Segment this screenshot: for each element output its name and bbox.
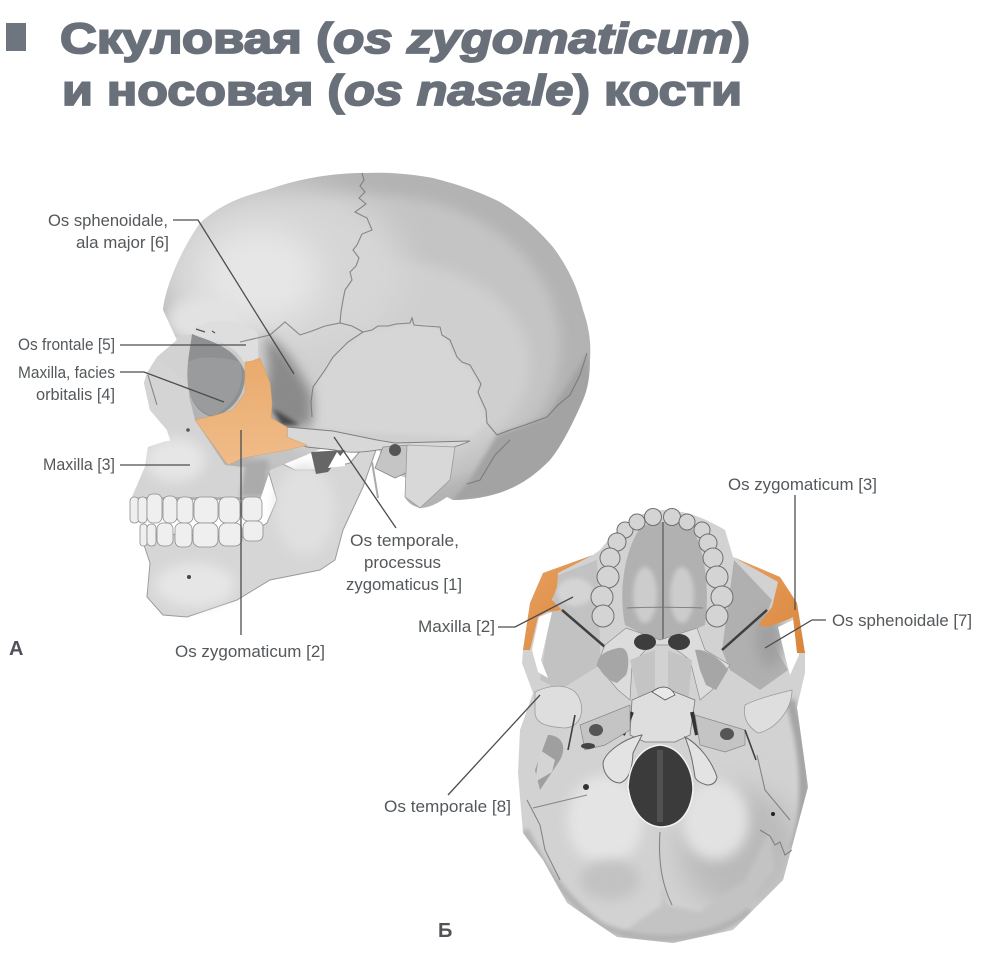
os zygomaticum highlight (orange) [195, 358, 307, 465]
label: Os zygomaticum [3]: Os zygomaticum [3] [728, 475, 877, 494]
label: Os temporale [8] [384, 695, 540, 816]
orbit [187, 321, 258, 417]
label: Os sphenoidale, ala major [6] [48, 211, 294, 374]
occipital condyles [603, 735, 717, 785]
zygomatic arch [287, 427, 470, 452]
upper teeth [591, 508, 733, 627]
pterygoid dark clefts [562, 610, 767, 650]
hard palate [622, 522, 707, 640]
nasal and brow area [144, 334, 194, 396]
label: Maxilla [3]: Maxilla [3] [43, 455, 115, 474]
choanae and pterygoid structures [597, 628, 730, 705]
white gap beside right arch [778, 620, 799, 675]
zygomatic bones right (orange) [733, 557, 805, 653]
title line 2: и носовая ( os nasale ) кости [62, 67, 742, 115]
label: Os sphenoidale [7]: Os sphenoidale [7] [832, 611, 972, 630]
illustration B: skull from below [518, 508, 808, 943]
title [6, 15, 750, 115]
panel letter B: Б [438, 920, 452, 942]
label: Os temporale, processus zygomaticus [1]: zygomaticus [1] [346, 575, 462, 594]
foramen inner shading [657, 750, 663, 822]
title bullet square [6, 23, 26, 51]
sutures [240, 173, 587, 484]
temporal mastoid region [372, 444, 455, 508]
maxilla area [132, 396, 268, 497]
label: Os sphenoidale, ala major [6]: ala major [6] [76, 233, 169, 252]
infratemporal regions [540, 560, 600, 690]
label: Maxilla, facies orbitalis [4] [18, 363, 224, 404]
label: Os temporale, processus zygomaticus [1]: processus [364, 553, 441, 572]
label: Os temporale, processus zygomaticus [1]: Os temporale, [350, 531, 459, 550]
label: Maxilla, facies orbitalis [4]: orbitalis [4] [36, 385, 115, 404]
skull base [518, 510, 808, 943]
temporal bone fossae [527, 686, 792, 880]
white gap beside left arch [532, 612, 552, 678]
illustration A: lateral skull [120, 160, 600, 617]
label: Os frontale [5]: Os frontale [5] [18, 335, 115, 354]
mandible [140, 443, 377, 617]
label: Maxilla, facies orbitalis [4]: Maxilla, facies [18, 363, 115, 382]
central basilar bone [623, 687, 697, 742]
label: Maxilla [2] [418, 597, 573, 636]
label: Os temporale, processus zygomaticus [1] [334, 437, 462, 594]
label: Os sphenoidale [7] [765, 611, 972, 648]
zygomatic bones left (orange) [523, 555, 593, 650]
foramen magnum [628, 745, 693, 827]
label: Os sphenoidale, ala major [6]: Os sphenoidale, [48, 211, 168, 230]
white gap under arch [328, 452, 345, 468]
panel letter A: А [9, 638, 23, 660]
title line 1: Скуловая ( os zygomaticum ) [60, 15, 750, 63]
label: Os zygomaticum [2]: Os zygomaticum [2] [175, 642, 325, 661]
teeth [130, 494, 263, 547]
label: Os temporale [8]: Os temporale [8] [384, 797, 511, 816]
gap under arch [311, 450, 345, 474]
cranium and face [132, 172, 590, 508]
label: Maxilla [2]: Maxilla [2] [418, 617, 495, 636]
